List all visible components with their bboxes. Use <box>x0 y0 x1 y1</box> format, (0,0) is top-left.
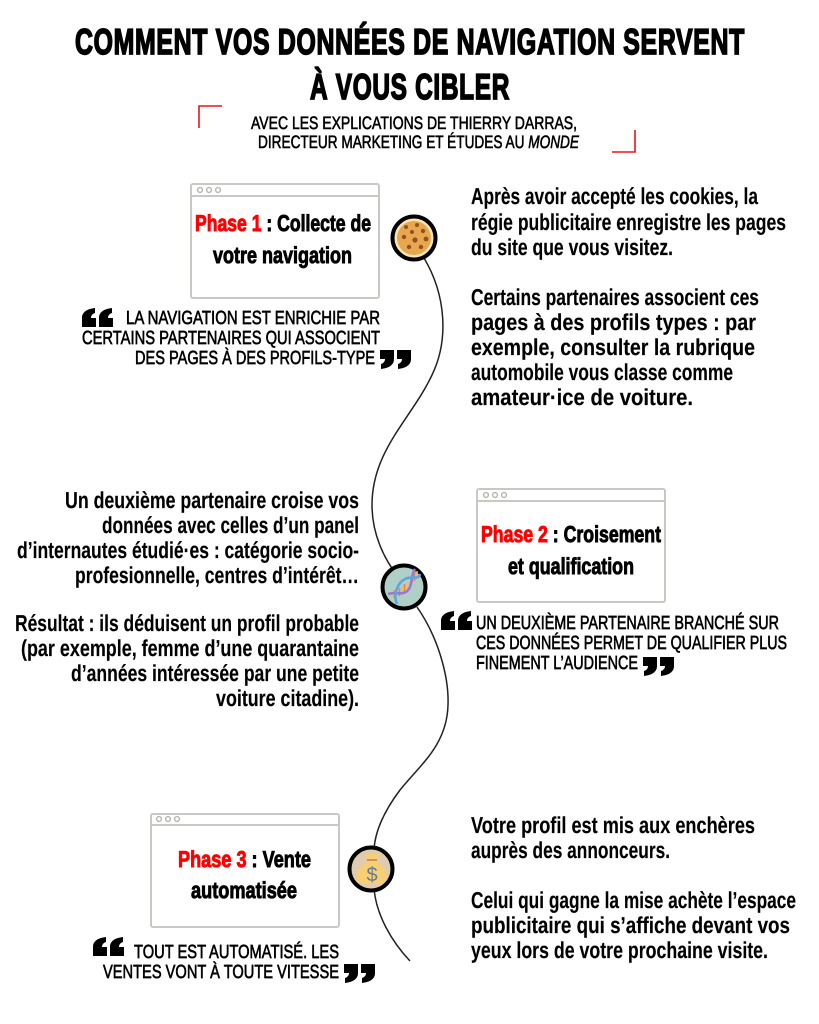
quote: phase 3: VENTES VONT À TOUTE VITESSE <box>103 961 339 983</box>
panel: phase 2 <box>477 489 665 602</box>
text block: phase 2 explanation: d’internautes étudié·es : catégorie socio- <box>17 537 359 563</box>
panel: phase 1: votre navigation <box>213 242 352 268</box>
quote: phase 2: FINEMENT L’AUDIENCE <box>476 653 638 674</box>
text block: phase 1 explanation: amateur·ice de voiture. <box>471 384 693 410</box>
quote: phase 3: TOUT EST AUTOMATISÉ. LES <box>134 941 339 963</box>
text block: phase 2 explanation: profesionnelle, centres d’intérêt… <box>75 562 359 588</box>
panel: phase 3: automatisée <box>191 877 297 903</box>
panel: phase 2: Phase 2 : Croisement <box>481 521 661 547</box>
text block: phase 2 explanation: (par exemple, femme d’une quarantaine <box>21 635 359 661</box>
text block: phase 1 explanation: du site que vous visitez. <box>471 234 673 260</box>
quote: phase 1: DES PAGES À DES PROFILS-TYPE <box>135 347 375 369</box>
title: À VOUS CIBLER <box>310 66 510 107</box>
icon: money bag <box>350 848 392 890</box>
text block: phase 2 explanation <box>15 487 359 711</box>
text block: phase 3 explanation <box>471 812 796 963</box>
text block: phase 2 explanation: Résultat : ils déduisent un profil probable <box>15 610 359 636</box>
panel: phase 1: Phase 1 : Collecte de <box>195 210 371 236</box>
text block: phase 2 explanation: voiture citadine). <box>216 685 359 711</box>
quote: phase 3 <box>93 937 375 983</box>
subtitle with red corner brackets: DIRECTEUR MARKETING ET ÉTUDES AU MONDE <box>258 132 580 152</box>
panel: phase 2: et qualification <box>508 553 634 579</box>
text block: phase 3 explanation: auprès des annonceurs. <box>471 837 670 863</box>
panel: phase 3: Phase 3 : Vente <box>178 846 311 872</box>
timeline curve <box>372 258 448 961</box>
panel: phase 1 <box>191 184 379 298</box>
quote: phase 2 <box>441 611 787 676</box>
text block: phase 2 explanation: Un deuxième partenaire croise vos <box>65 487 359 513</box>
quote: phase 1: LA NAVIGATION EST ENRICHIE PAR <box>126 308 380 329</box>
panel: phase 3 <box>151 814 339 927</box>
text block: phase 2 explanation: d’années intéressée par une petite <box>71 660 359 686</box>
text block: phase 1 explanation <box>471 183 786 410</box>
text block: phase 1 explanation: pages à des profils types : par <box>471 309 756 335</box>
subtitle with red corner brackets <box>199 106 635 152</box>
icon: money bag: $ <box>366 864 378 886</box>
subtitle with red corner brackets: AVEC LES EXPLICATIONS DE THIERRY DARRAS, <box>251 113 577 133</box>
icon: DNA <box>382 566 426 608</box>
icon: cookie <box>392 216 436 260</box>
text block: phase 2 explanation: données avec celles d’un panel <box>102 512 359 538</box>
text block: phase 1 explanation: automobile vous classe comme <box>471 359 733 385</box>
title <box>75 21 745 107</box>
text block: phase 1 explanation: exemple, consulter la rubrique <box>471 334 755 360</box>
quote: phase 1: CERTAINS PARTENAIRES QUI ASSOCIENT <box>82 328 380 349</box>
quote: phase 1 <box>82 308 411 369</box>
